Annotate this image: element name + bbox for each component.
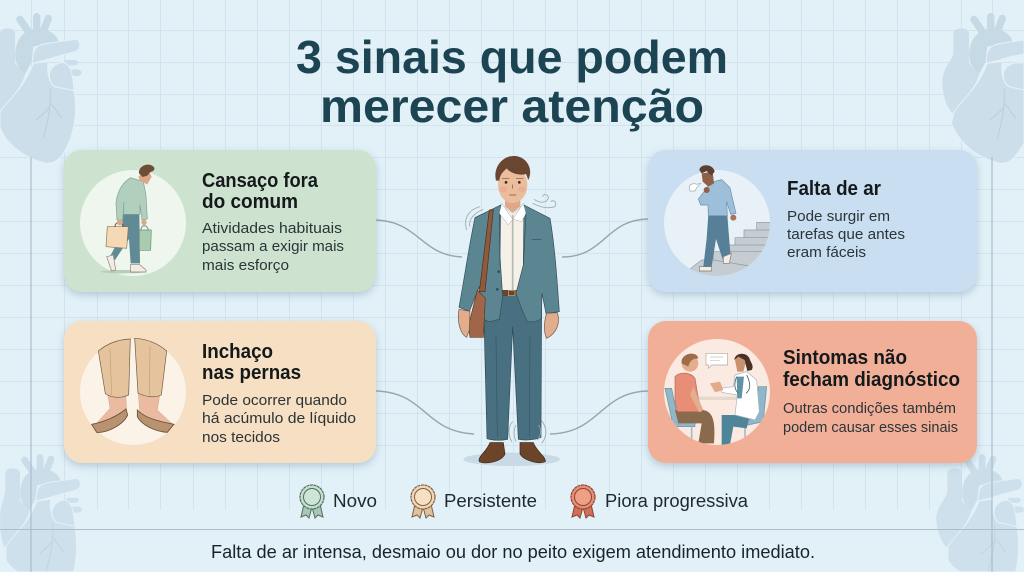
description: podem causar esses sinais	[783, 419, 958, 436]
description: nos tecidos	[202, 429, 280, 446]
description: Pode surgir em	[787, 208, 890, 225]
title: 3 sinais que podem	[296, 31, 728, 83]
description: mais esforço	[202, 257, 289, 274]
icon: heart bottom right	[936, 458, 1024, 572]
connector lines	[376, 219, 648, 434]
description: há acúmulo de líquido	[202, 410, 356, 427]
label: novo: Novo	[333, 491, 377, 511]
panel: inchaço nas pernas	[64, 321, 376, 463]
title: merecer atenção	[320, 80, 704, 132]
footer warning: Falta de ar intensa, desmaio ou dor no peito exigem atendimento imediato.	[211, 542, 815, 562]
description: Atividades habituais	[202, 220, 342, 237]
description	[202, 392, 356, 446]
heading line 2: do comum	[202, 191, 298, 213]
panel: sintomas não fecham diagnóstico	[648, 321, 977, 463]
heading line 2: nas pernas	[202, 362, 301, 384]
heading: Cansaço fora	[202, 170, 319, 192]
description: passam a exigir mais	[202, 238, 344, 255]
description	[787, 208, 905, 261]
title	[296, 31, 728, 132]
label: persistente: Persistente	[444, 491, 537, 511]
description: eram fáceis	[787, 244, 866, 261]
badge: novo	[300, 485, 324, 518]
badge: piora progressiva	[571, 485, 595, 518]
icon: tired man with bags	[100, 165, 154, 273]
icon: breathless man	[689, 165, 736, 271]
heading: Sintomas não	[783, 347, 907, 369]
icon: heart top right	[942, 17, 1024, 163]
icon: swollen ankles	[92, 338, 174, 432]
description	[783, 400, 958, 436]
heading line 2: fecham diagnóstico	[783, 369, 960, 391]
description	[202, 220, 344, 274]
legend	[300, 485, 749, 518]
icon: patient and doctor	[665, 353, 767, 445]
icon: heart top left	[0, 17, 82, 163]
description: Pode ocorrer quando	[202, 392, 347, 409]
heading: Inchaço	[202, 341, 273, 363]
panel: falta de ar	[648, 150, 977, 292]
heading: Falta de ar	[787, 178, 881, 200]
badge: persistente	[411, 485, 435, 518]
label: piora progressiva: Piora progressiva	[605, 491, 749, 511]
motion lines	[466, 195, 556, 443]
icon: stairs	[690, 222, 773, 278]
description: tarefas que antes	[787, 226, 905, 243]
description: Outras condições também	[783, 400, 956, 417]
central figure: man	[458, 156, 560, 466]
panel: cansaço fora do comum	[64, 150, 376, 292]
icon: heart bottom left	[0, 458, 82, 572]
